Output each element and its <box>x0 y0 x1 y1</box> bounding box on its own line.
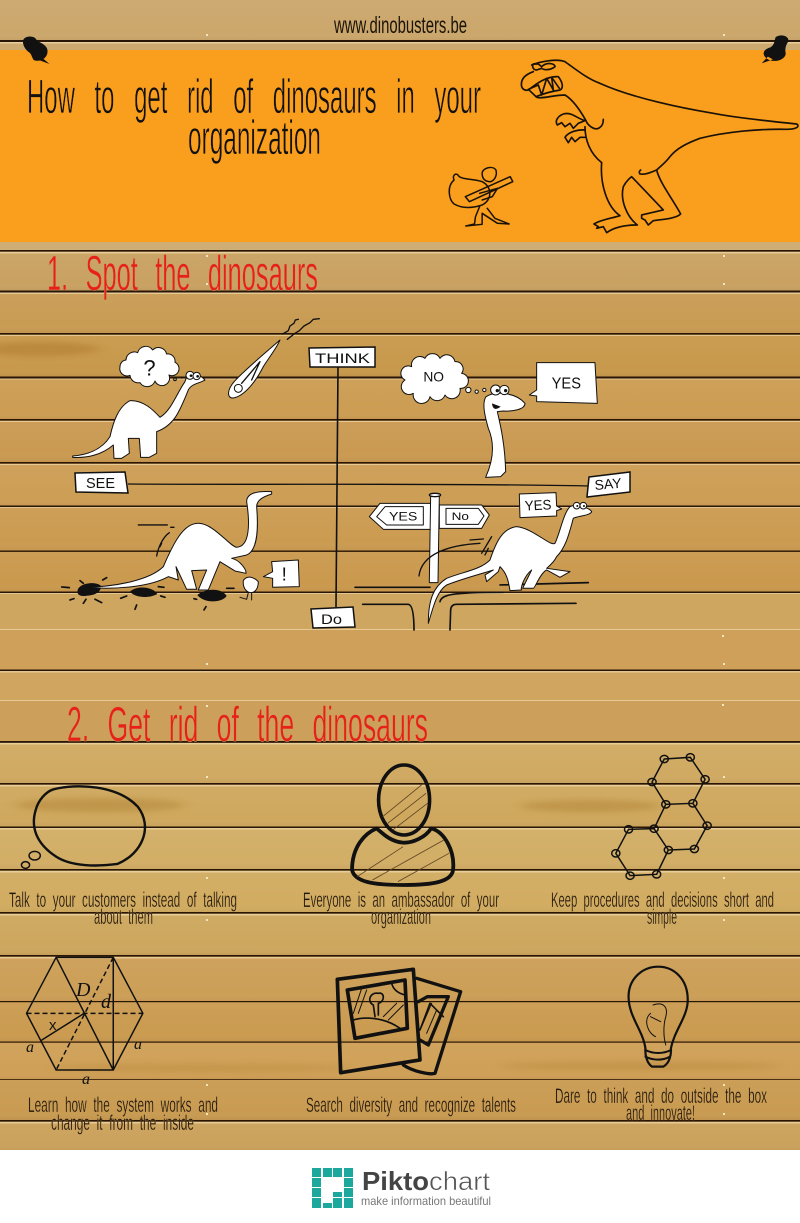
caption: talk to customers: about them <box>94 906 153 929</box>
icon: photographs <box>337 969 461 1074</box>
icon: left push pin <box>23 37 49 64</box>
speech box YES: YES <box>552 375 581 392</box>
illustration: neck dinosaur thinking NO saying YES <box>401 354 597 477</box>
thought bubble NO <box>401 354 486 403</box>
caption: ambassador: Everyone is an ambassador of your <box>303 889 499 912</box>
label: THINK: THINK <box>315 350 371 366</box>
meteor <box>229 319 319 398</box>
caption: learn the system: change it from the inside <box>51 1112 194 1135</box>
logo mark <box>312 1168 353 1208</box>
illustration: dinosaur taking NO path at crossroad <box>355 493 592 630</box>
caption: talk to customers: Talk to your customers instead of talking <box>9 889 237 912</box>
icon: geometric system prism: d <box>101 991 112 1013</box>
tagline: make information beautiful <box>361 1194 491 1208</box>
label: SAY <box>587 472 630 497</box>
road lines <box>355 583 588 630</box>
caption: dare to think: and innovate! <box>626 1102 695 1125</box>
label: SEE <box>75 472 128 493</box>
dinosaur looking up <box>73 374 205 458</box>
label: DO <box>311 607 355 628</box>
speech box YES: YES <box>524 496 552 514</box>
caption: ambassador: organization <box>371 906 431 929</box>
caption: learn the system: Learn how the system works and <box>28 1094 218 1117</box>
icon: person silhouette <box>352 765 453 885</box>
panel: orange title banner <box>0 50 800 242</box>
logo: Piktochart <box>312 1166 491 1208</box>
heading: 1. Spot the dinosaurs: 1. Spot the dinosaurs <box>47 247 318 301</box>
signpost: YES <box>389 510 417 524</box>
speech box with exclamation <box>263 560 299 587</box>
icon: geometric system prism: a <box>134 1036 142 1053</box>
icon: geometric system prism: a <box>82 1071 90 1088</box>
heading: 2. Get rid of the dinosaurs: 2. Get rid of the dinosaurs <box>67 698 428 752</box>
label: SEE: SEE <box>86 475 115 492</box>
running dinosaur <box>428 506 592 623</box>
illustration: SEE / THINK dinosaur with question and meteor <box>73 319 319 458</box>
chick <box>240 577 258 600</box>
label: DO: Do <box>321 611 342 627</box>
ink splats <box>62 578 234 610</box>
title: organization <box>188 112 321 165</box>
icon: hexagon molecule <box>612 754 711 879</box>
icon: geometric system prism: x <box>49 1017 57 1034</box>
speech box with exclamation: ! <box>282 564 287 585</box>
thought bubble with question mark <box>120 346 183 387</box>
icon: geometric system prism: a <box>26 1039 34 1056</box>
thought bubble NO: NO <box>423 369 444 385</box>
diagram: think / see / say / do axes <box>75 347 630 628</box>
icon: geometric system prism: D <box>75 979 91 1001</box>
icon: geometric system prism <box>26 957 143 1088</box>
thought bubble with question mark: ? <box>143 355 156 380</box>
illustration: dinosaur stomping on bird <box>62 491 299 610</box>
wordmark: Piktochart <box>362 1166 491 1196</box>
icon: thought bubble <box>21 786 145 868</box>
illustration: hunter with bazooka <box>449 168 513 226</box>
speech box YES <box>519 493 562 518</box>
motion lines <box>419 537 492 576</box>
signpost: No <box>452 511 469 523</box>
label: THINK <box>309 347 375 367</box>
icon: light bulb <box>629 967 688 1067</box>
speech box YES <box>529 363 597 403</box>
white footer band <box>0 1150 800 1223</box>
caption: keep procedures short: simple <box>647 906 677 929</box>
caption: search diversity: Search diversity and recognize talents <box>306 1094 516 1117</box>
label: SAY: SAY <box>594 475 623 493</box>
illustration: T-rex <box>521 60 798 233</box>
website address: www.dinobusters.be <box>333 12 467 38</box>
icon: right push pin <box>762 35 788 63</box>
signpost <box>369 493 489 583</box>
